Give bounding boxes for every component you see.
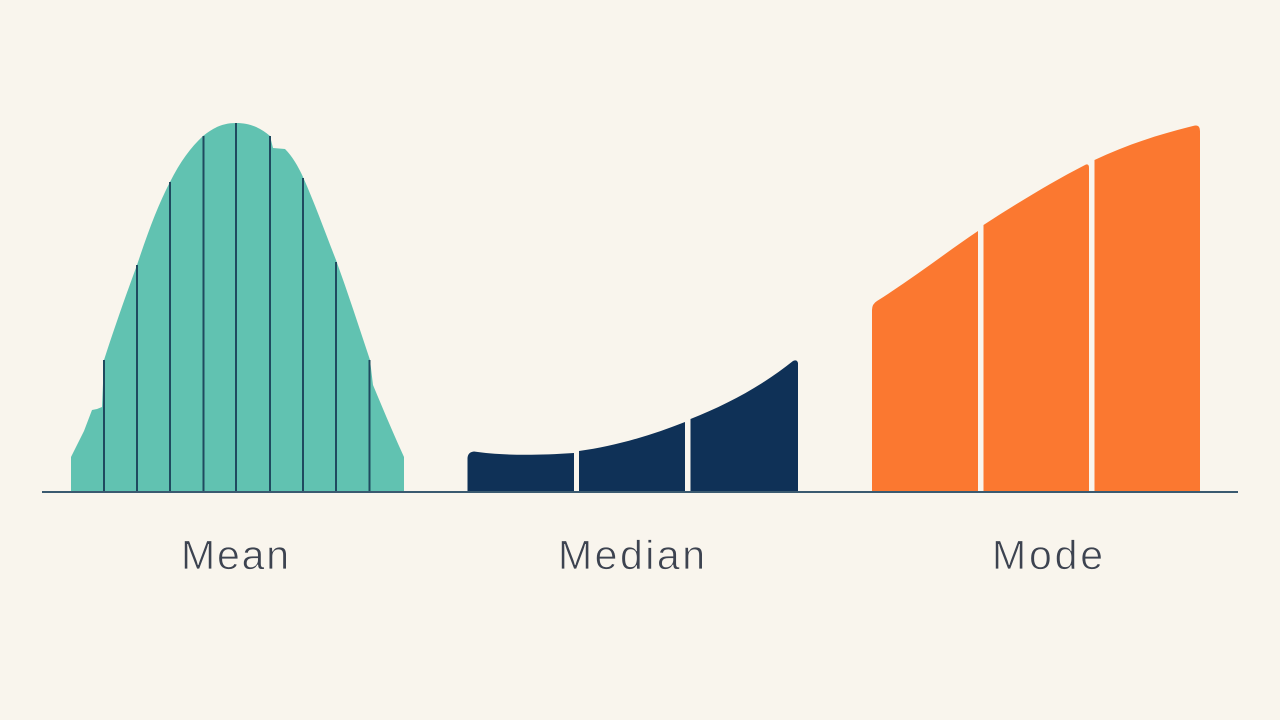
baseline axis [42,491,1238,493]
chart: median rising curve [468,360,798,491]
navy segments [468,452,574,491]
chart: mean bell curve [71,123,404,491]
label: Median: Median [558,532,705,578]
chart: mode rising curve [872,126,1200,491]
orange segments [872,231,978,491]
label: Mode: Mode [992,532,1103,578]
label: Mean: Mean [181,532,289,578]
teal bell shape [71,123,404,491]
dark dividers [104,123,370,491]
